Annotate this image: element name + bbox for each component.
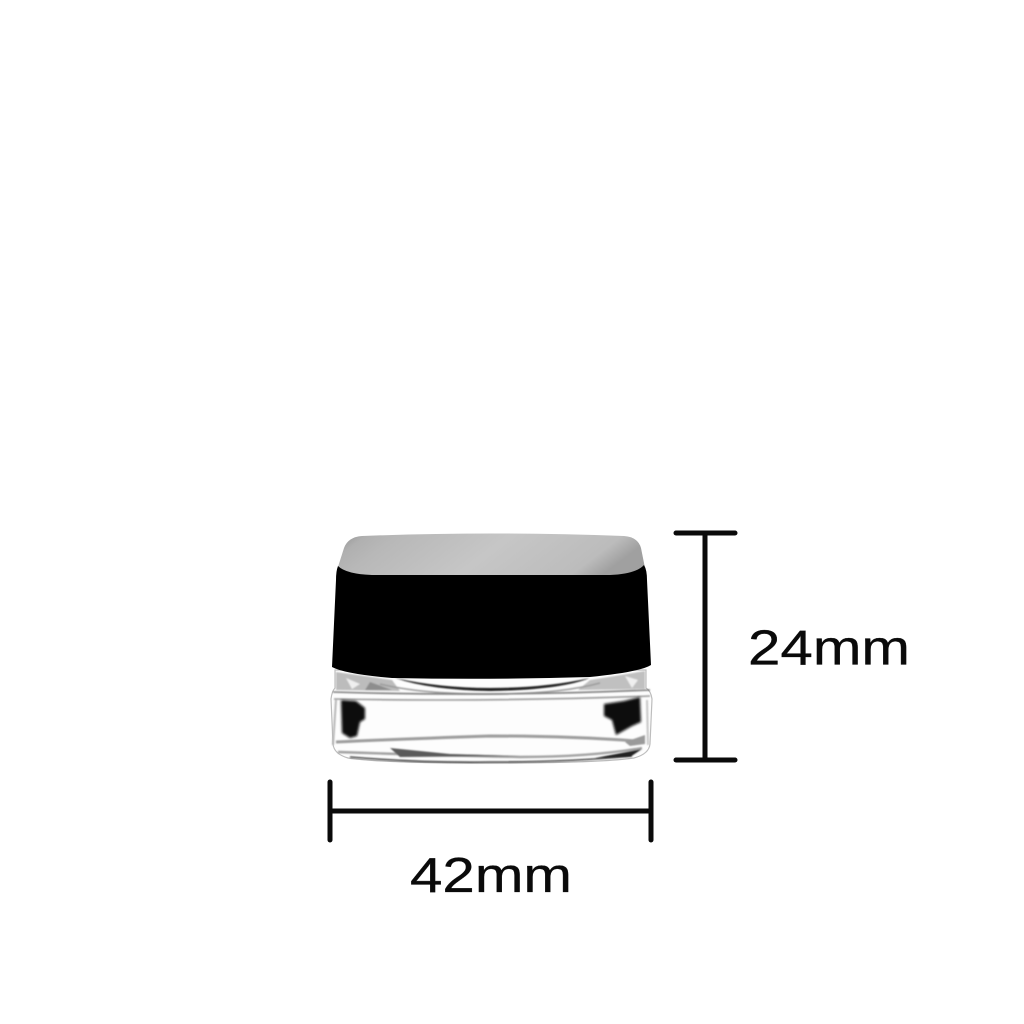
- lid: black side: [332, 565, 651, 679]
- jar: glass base: [331, 670, 652, 763]
- product: glass jar with black lid: [331, 534, 652, 763]
- height dimension marker: [676, 533, 735, 760]
- width dimension marker: [330, 782, 651, 840]
- glass: dark reflection left: [341, 700, 365, 738]
- width label: 42mm: [410, 849, 572, 903]
- glass: dark reflection right: [604, 697, 641, 735]
- lid: top face: [337, 534, 645, 580]
- height label: 24mm: [748, 622, 910, 676]
